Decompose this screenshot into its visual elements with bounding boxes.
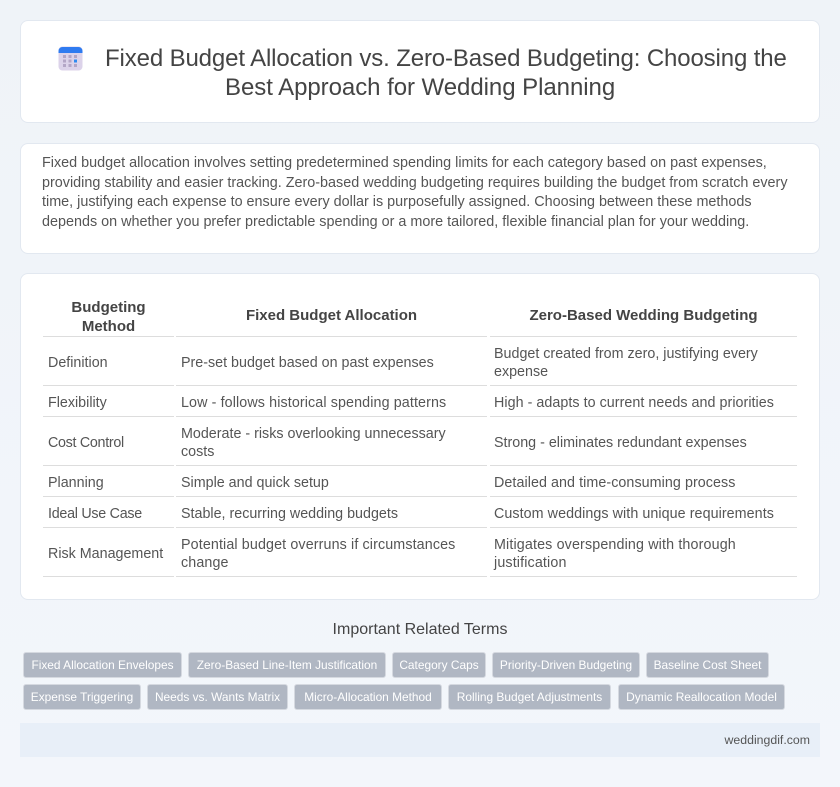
row: cost control: Strong - eliminates redundant expenses: [494, 435, 747, 451]
row: risk management: justification: [494, 555, 567, 571]
related terms tags: [23, 652, 785, 710]
related terms tags: Fixed Allocation Envelopes: [31, 658, 174, 672]
row: definition: Definition: [48, 355, 108, 371]
row: flexibility: [48, 395, 774, 411]
row: planning: Planning: [48, 475, 104, 491]
related terms tags: Micro-Allocation Method: [304, 690, 432, 704]
row: planning: Detailed and time-consuming process: [494, 475, 735, 491]
related terms tags: Needs vs. Wants Matrix: [155, 690, 280, 704]
intro paragraph: providing stability and easier tracking. Zero-based wedding budgeting requires building the budget from scratch every: [42, 175, 788, 191]
footer source: weddingdif.com: [725, 733, 810, 747]
row: cost control: costs: [181, 444, 214, 460]
comparison table panel: [20, 273, 820, 600]
row: definition: Pre-set budget based on past expenses: [181, 355, 434, 371]
row: definition: expense: [494, 364, 548, 380]
intro text panel: [20, 143, 820, 254]
table header: Zero-Based Wedding Budgeting: [529, 307, 758, 324]
row: risk management: Mitigates overspending with thorough: [494, 537, 736, 553]
row: ideal use case: Stable, recurring wedding budgets: [181, 506, 398, 522]
row: flexibility: High - adapts to current needs and priorities: [494, 395, 774, 411]
icon: calendar: [58, 46, 82, 70]
footer bar: [20, 723, 820, 757]
intro paragraph: time, justifying each expense to ensure every dollar is purposefully assigned. Choosing between these methods: [42, 194, 752, 210]
row: planning: [48, 475, 735, 491]
related terms tags: Category Caps: [399, 658, 479, 672]
title: Fixed Budget Allocation vs. Zero-Based Budgeting: Choosing the: [105, 45, 787, 72]
intro paragraph: [42, 155, 788, 230]
related terms tags: Zero-Based Line-Item Justification: [197, 658, 377, 672]
title: [105, 45, 787, 101]
related terms tags: Priority-Driven Budgeting: [500, 658, 632, 672]
related terms tags: Dynamic Reallocation Model: [626, 690, 777, 704]
related terms tags: Expense Triggering: [31, 690, 133, 704]
row: risk management: Risk Management: [48, 546, 163, 562]
related terms tags: Baseline Cost Sheet: [654, 658, 761, 672]
intro paragraph: depends on whether you prefer predictable spending or a more tailored, flexible financial plan for your wedding.: [42, 214, 749, 230]
table header: Method: [82, 318, 135, 335]
row: risk management: Potential budget overruns if circumstances: [181, 537, 455, 553]
row: cost control: Cost Control: [48, 435, 124, 451]
intro paragraph: Fixed budget allocation involves setting predetermined spending limits for each category based on past expenses,: [42, 155, 767, 171]
row: ideal use case: [48, 506, 774, 522]
related terms heading: Important Related Terms: [333, 621, 507, 638]
row: cost control: [48, 426, 747, 460]
row: ideal use case: Ideal Use Case: [48, 506, 142, 522]
row: risk management: [48, 537, 736, 571]
row: planning: Simple and quick setup: [181, 475, 329, 491]
row: cost control: Moderate - risks overlooking unnecessary: [181, 426, 446, 442]
row: ideal use case: Custom weddings with unique requirements: [494, 506, 774, 522]
row: definition: [48, 346, 758, 380]
row: definition: Budget created from zero, justifying every: [494, 346, 758, 362]
row: flexibility: Low - follows historical spending patterns: [181, 395, 446, 411]
table header: Fixed Budget Allocation: [246, 307, 417, 324]
table header: Budgeting: [71, 299, 146, 316]
row: risk management: change: [181, 555, 229, 571]
table header: [71, 299, 758, 335]
title: Best Approach for Wedding Planning: [225, 74, 615, 101]
row: flexibility: Flexibility: [48, 395, 107, 411]
header card: [20, 20, 820, 123]
related terms tags: Rolling Budget Adjustments: [457, 690, 602, 704]
